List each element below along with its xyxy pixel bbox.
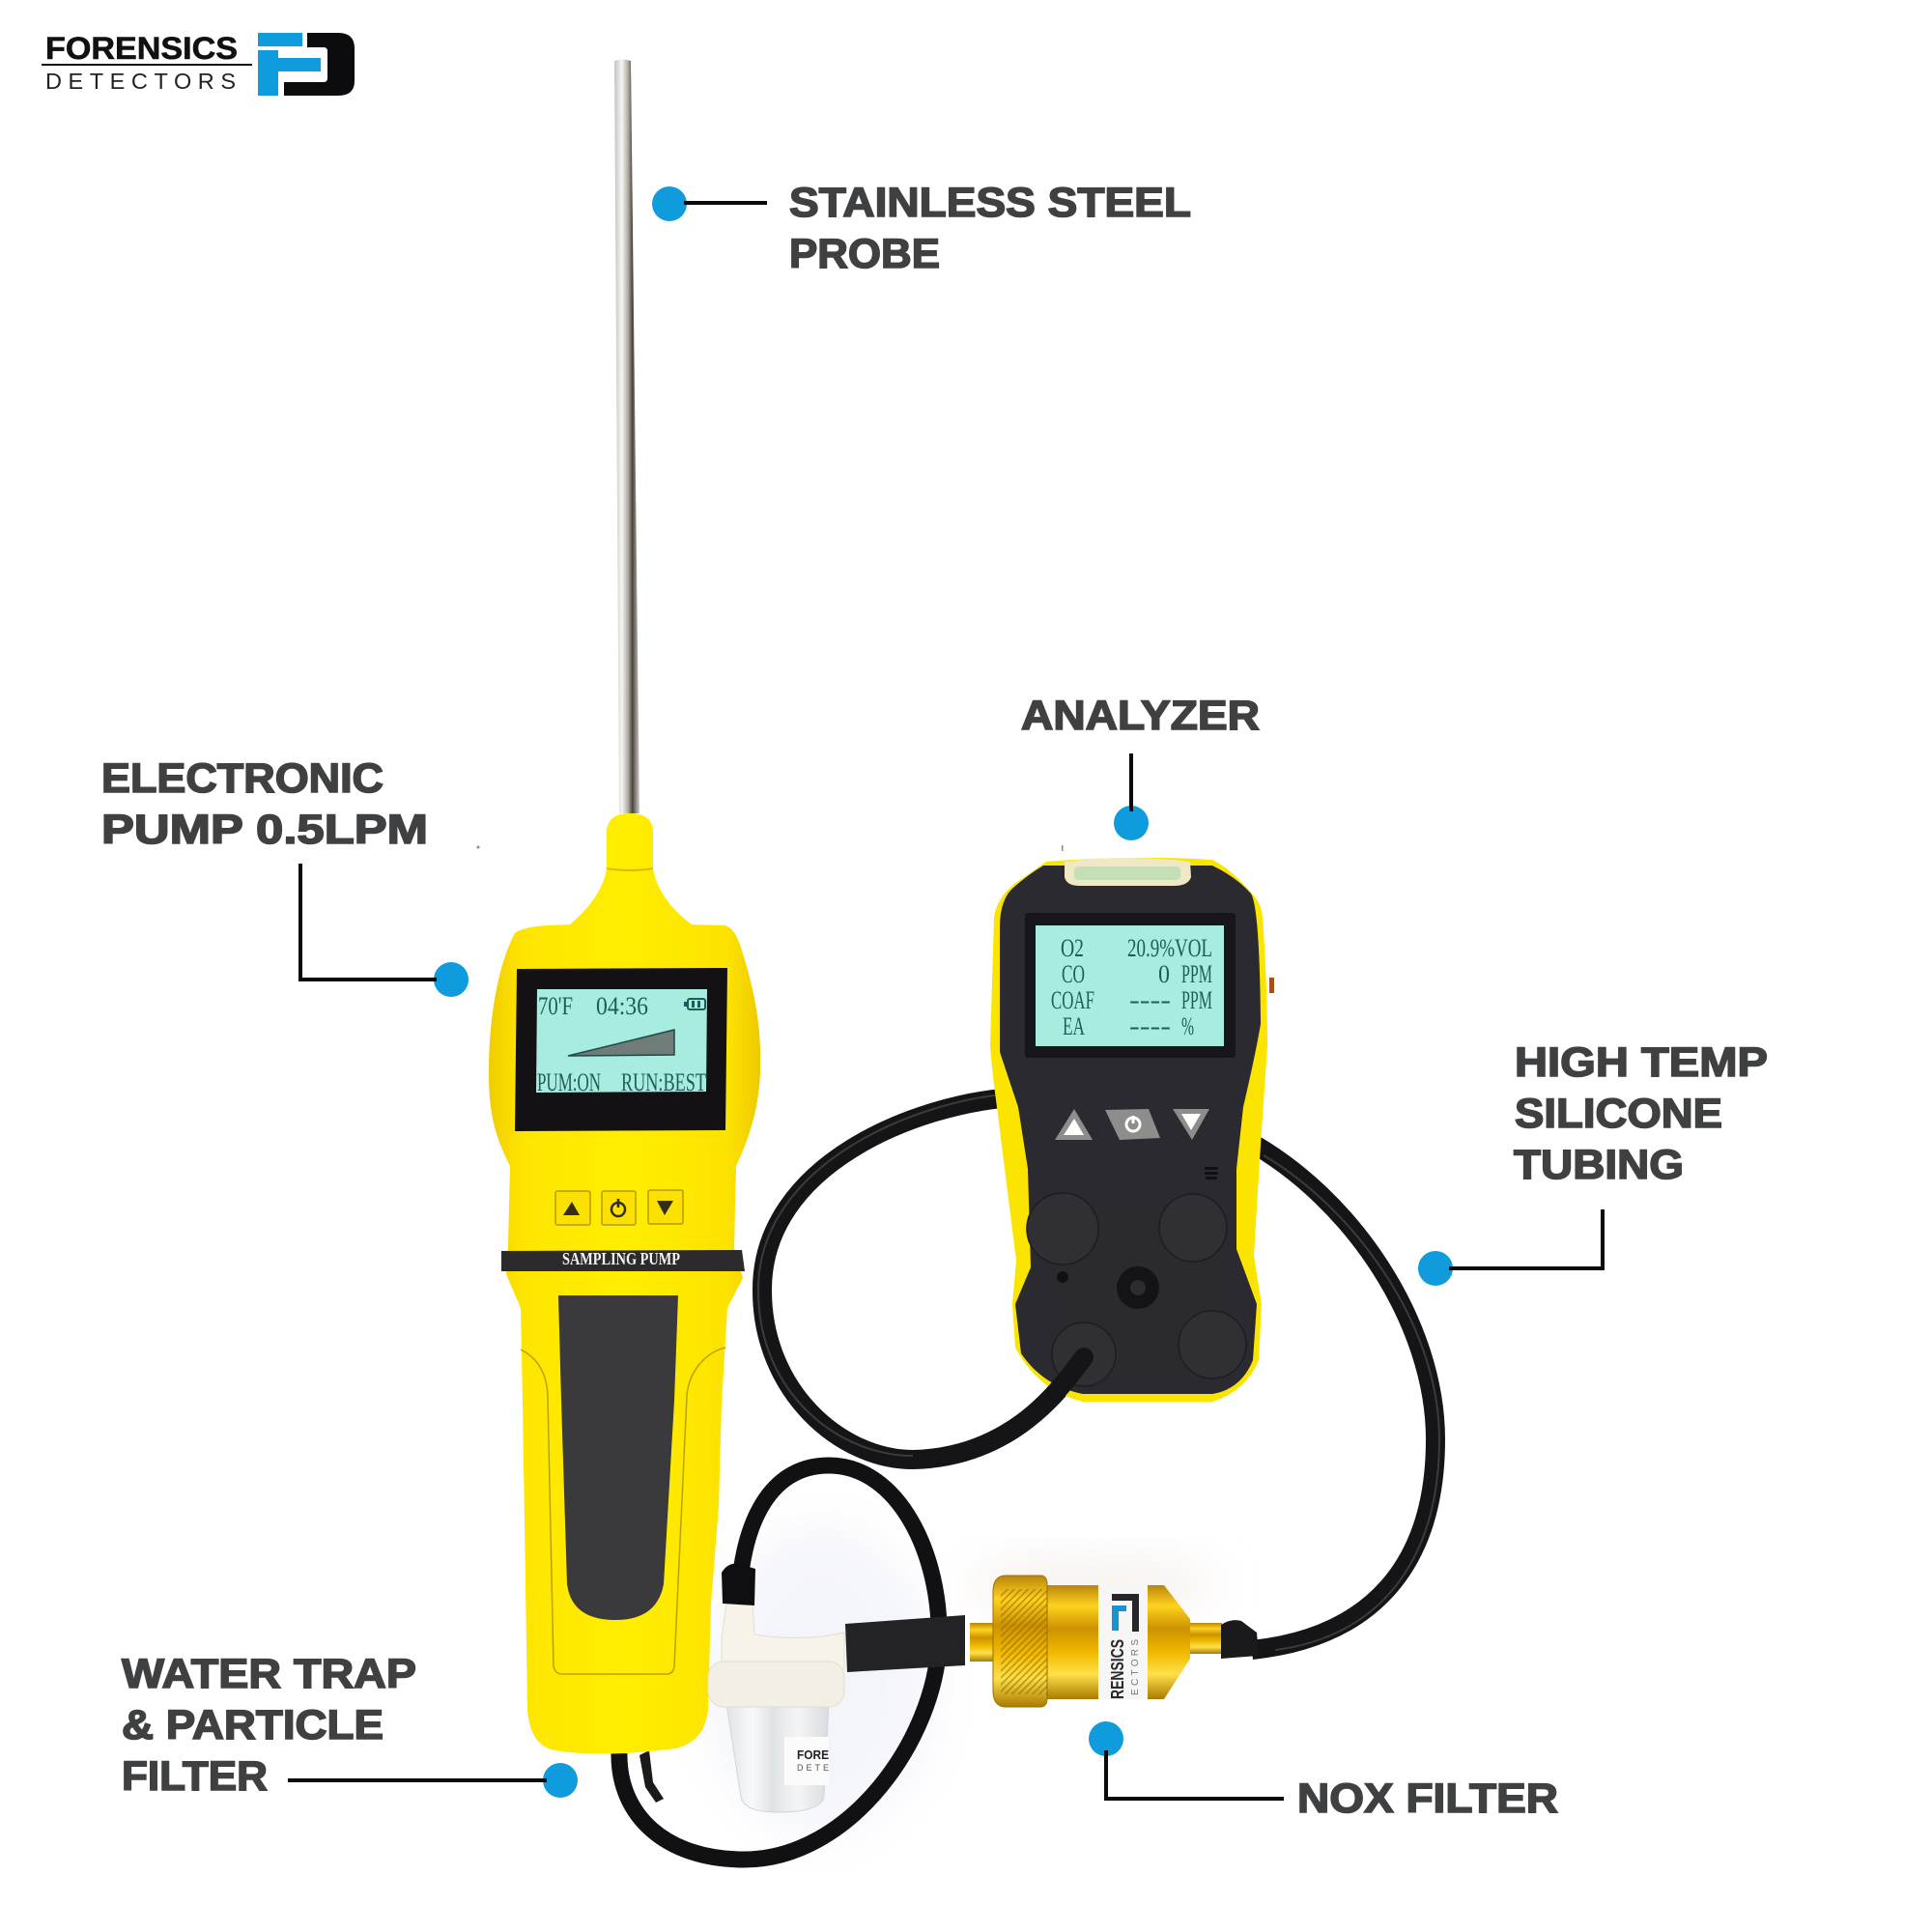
analyzer LCD screen: % (1181, 1012, 1194, 1040)
pump LCD screen: PUM:ON (537, 1068, 601, 1096)
analyzer LCD screen: CO (1062, 960, 1085, 988)
specks (477, 845, 1063, 851)
sampling pump (489, 813, 760, 1754)
analyzer LCD screen (1036, 925, 1224, 1046)
label text (122, 1651, 416, 1800)
marker dot (1089, 1721, 1123, 1756)
stainless steel probe (614, 60, 639, 813)
analyzer LCD screen: COAF (1051, 986, 1094, 1014)
marker dot (434, 962, 469, 997)
analyzer LCD screen: ---- (1129, 986, 1171, 1014)
analyzer tube end (1005, 1357, 1084, 1435)
filter bowl label: FORE (797, 1747, 829, 1762)
analyzer top window (1065, 858, 1191, 886)
analyzer LCD screen: PPM (1181, 960, 1212, 988)
logo: Forensics Detectors (42, 31, 355, 96)
filter bowl (726, 1704, 829, 1812)
label text: NOX FILTER (1297, 1776, 1558, 1822)
analyzer black body (1000, 866, 1261, 1394)
filter white label (1098, 1585, 1148, 1699)
analyzer sensor cap (1027, 1193, 1246, 1386)
filter bowl label (784, 1737, 829, 1785)
marker dot (1114, 806, 1149, 840)
pump body (489, 813, 760, 1754)
sampling pump band: SAMPLING PUMP (562, 1249, 680, 1268)
leader line (1129, 753, 1133, 811)
brass connector (970, 1623, 993, 1662)
pump button down (648, 1190, 683, 1224)
label text: WATER TRAP (122, 1651, 416, 1697)
label text: ELECTRONIC (101, 755, 384, 802)
label text: ANALYZER (1021, 693, 1260, 739)
pump button up (555, 1191, 590, 1225)
filter white label: RENSICS (1108, 1639, 1127, 1699)
leader line (288, 1778, 547, 1782)
callout: NOx filter (1089, 1721, 1558, 1822)
leader line (300, 864, 437, 980)
logo wordmark: FORENSICS (45, 31, 238, 66)
analyzer side button (1269, 978, 1274, 993)
logo wordmark (42, 31, 252, 94)
callout: water trap and particle filter (122, 1651, 578, 1800)
black boot (1221, 1620, 1259, 1659)
brass body (1047, 1585, 1190, 1699)
tube: analyzer loop (758, 1094, 1084, 1460)
callout: high temp silicone tubing (1418, 1039, 1768, 1286)
label text: PROBE (789, 231, 940, 277)
leader line (1449, 1209, 1603, 1268)
black tube sleeve (845, 1615, 965, 1672)
filter collar (708, 1662, 844, 1707)
tube: water trap loop (619, 1465, 939, 1860)
pump LCD screen: RUN:BEST (621, 1068, 706, 1096)
filter white label: ECTORS (1130, 1639, 1141, 1695)
leader line (1106, 1750, 1284, 1799)
logo FD mark (258, 33, 355, 96)
pump screen bezel (515, 968, 727, 1131)
pump button power (602, 1191, 636, 1225)
analyzer screen bezel (1025, 913, 1236, 1058)
marker dot (652, 186, 687, 221)
analyzer LCD screen: EA (1063, 1012, 1085, 1040)
filter white stem and cap (722, 1604, 844, 1673)
leader line (684, 201, 767, 205)
pump LCD screen: 70'F (538, 992, 573, 1020)
callout: analyzer (1021, 693, 1260, 840)
analyzer yellow case (990, 858, 1267, 1402)
label text (1514, 1039, 1768, 1188)
label text: PUMP 0.5LPM (101, 807, 428, 853)
analyzer button down (1173, 1109, 1209, 1140)
logo wordmark: DETECTORS (45, 69, 236, 94)
analyzer LCD screen: ---- (1129, 1012, 1171, 1040)
tube: high temp silicone tubing (1246, 1140, 1439, 1650)
analyzer button up (1055, 1109, 1093, 1140)
label text: HIGH TEMP (1515, 1039, 1768, 1086)
label text (101, 755, 428, 853)
analyzer LCD screen: O2 (1061, 934, 1084, 962)
water trap and particle filter (708, 1564, 965, 1812)
label text: SILICONE (1515, 1091, 1722, 1137)
analyzer LCD screen: 0 (1158, 960, 1170, 988)
callout: electronic pump (101, 755, 469, 997)
analyzer speaker (1205, 1167, 1218, 1179)
sampling pump band (501, 1249, 745, 1271)
analyzer (990, 858, 1274, 1402)
label text: FILTER (122, 1753, 268, 1800)
analyzer button power (1105, 1109, 1160, 1140)
filter bowl label: DETE (797, 1763, 829, 1773)
label text: & PARTICLE (122, 1702, 384, 1748)
label text: TUBING (1514, 1142, 1684, 1188)
marker dot (1418, 1251, 1453, 1286)
pump LCD screen (536, 989, 707, 1096)
tube end boot on filter (722, 1564, 755, 1605)
NOx filter (970, 1576, 1259, 1707)
brass knurled nut (993, 1576, 1047, 1707)
label text: STAINLESS STEEL (789, 180, 1191, 226)
label text (789, 180, 1191, 277)
analyzer LCD screen: PPM (1181, 986, 1212, 1014)
pump LCD screen: 04:36 (596, 992, 648, 1020)
pump grip outline (521, 1348, 725, 1674)
callout: stainless steel probe (652, 180, 1191, 277)
brass tip (1190, 1623, 1222, 1654)
marker dot (543, 1763, 578, 1798)
pump dark grip (558, 1295, 678, 1620)
analyzer LCD screen: 20.9%VOL (1127, 934, 1212, 962)
